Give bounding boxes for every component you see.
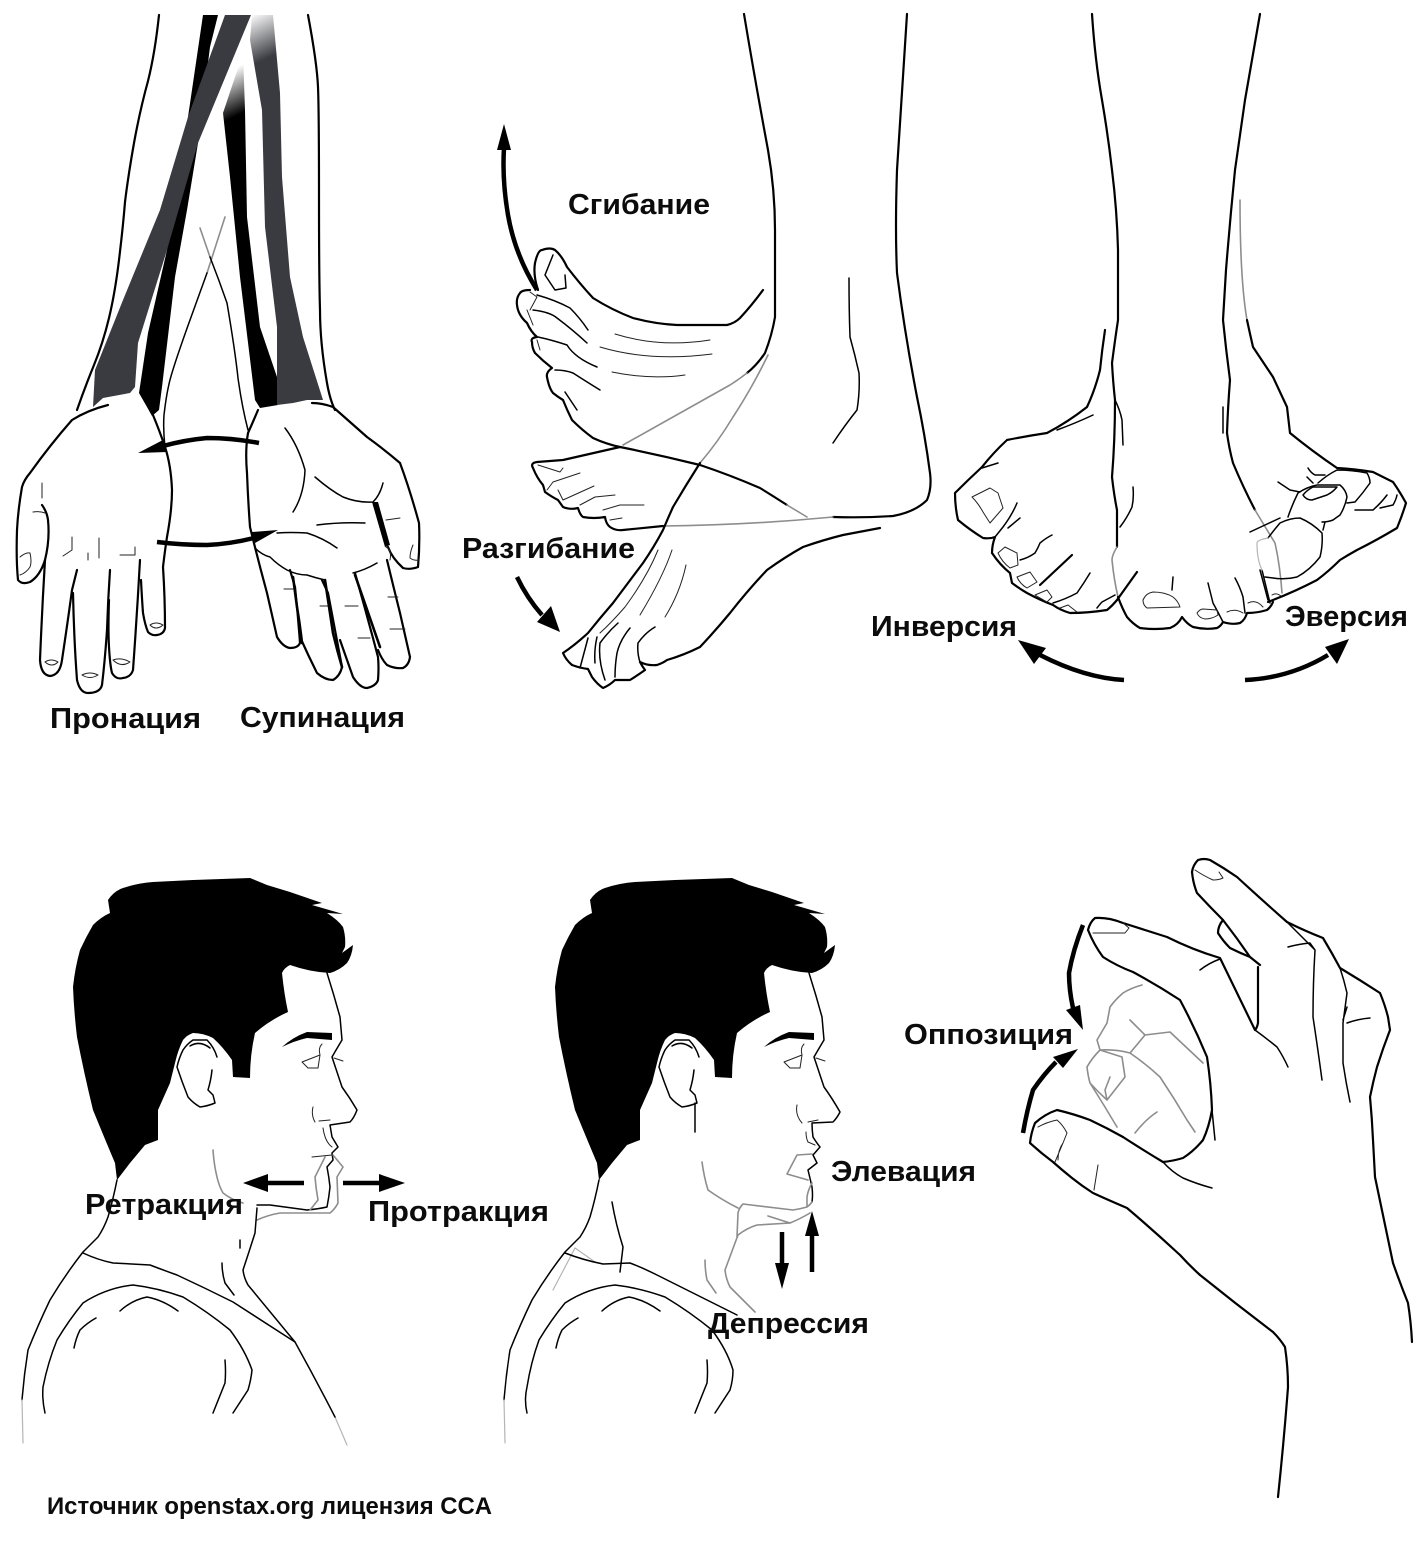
hair (73, 878, 353, 1180)
hair (555, 878, 835, 1180)
arrow: protraction (343, 1174, 405, 1192)
arrow: retraction (243, 1174, 304, 1192)
panel: foot inversion and eversion (871, 14, 1408, 680)
panel: ankle flexion and extension (462, 14, 931, 688)
ear (177, 1040, 217, 1107)
hand: supination (246, 403, 419, 688)
foot: neutral (532, 447, 663, 530)
eye (784, 1044, 825, 1068)
eyebrow (282, 1032, 332, 1047)
arrow: flexion (497, 124, 537, 290)
leg outlines (623, 14, 931, 526)
label: inversion: Инверсия (871, 611, 1017, 643)
label: opposition: Оппозиция (904, 1019, 1073, 1051)
label: retraction: Ретракция (85, 1189, 243, 1221)
panel: hand opposition (904, 859, 1412, 1497)
arrow: supination (157, 530, 278, 545)
right foot (1240, 200, 1406, 602)
forearm bones (93, 15, 323, 416)
middle finger and palm (1192, 859, 1412, 1342)
arrow: eversion (1245, 639, 1349, 680)
label: flexion: Сгибание (568, 189, 710, 221)
ankle line (833, 278, 859, 443)
panel: head retraction and protraction (22, 878, 549, 1445)
left foot (955, 330, 1137, 613)
neck and shoulder (22, 1180, 347, 1445)
thumb (1030, 1110, 1288, 1497)
foot: extended (563, 463, 880, 688)
arrow: pronation (138, 438, 259, 453)
label: pronation: Пронация (50, 703, 201, 735)
arrow: depression (775, 1232, 789, 1289)
foot: flexed (517, 248, 807, 517)
arm outlines (77, 15, 335, 447)
nails (1038, 870, 1223, 1190)
face outline (808, 973, 840, 1202)
label: eversion: Эверсия (1285, 601, 1408, 633)
label: protraction: Протракция (368, 1196, 549, 1228)
panel: forearm pronation and supination (17, 15, 419, 735)
label: supination: Супинация (240, 702, 405, 734)
arrow: opposition upper (1066, 925, 1083, 1030)
hand: pronation (17, 405, 172, 693)
arrow: inversion (1018, 640, 1124, 680)
source note: Источник openstax.org лицензия CCA (47, 1493, 492, 1520)
eyebrow (764, 1032, 814, 1047)
label: extension: Разгибание (462, 533, 635, 565)
label: elevation: Элевация (831, 1156, 976, 1188)
arrow: elevation (805, 1211, 819, 1272)
arrow: opposition lower (1023, 1049, 1078, 1133)
eye (302, 1044, 343, 1068)
label: depression: Депрессия (708, 1308, 869, 1340)
index finger (1088, 918, 1258, 1162)
central leg and foot (1092, 14, 1282, 629)
panel: head elevation and depression (504, 878, 976, 1443)
arrow: extension (517, 577, 560, 632)
inner fingers (1087, 985, 1203, 1133)
ear (659, 1040, 699, 1132)
neck and shoulder (504, 1180, 737, 1443)
face outline (257, 973, 357, 1210)
